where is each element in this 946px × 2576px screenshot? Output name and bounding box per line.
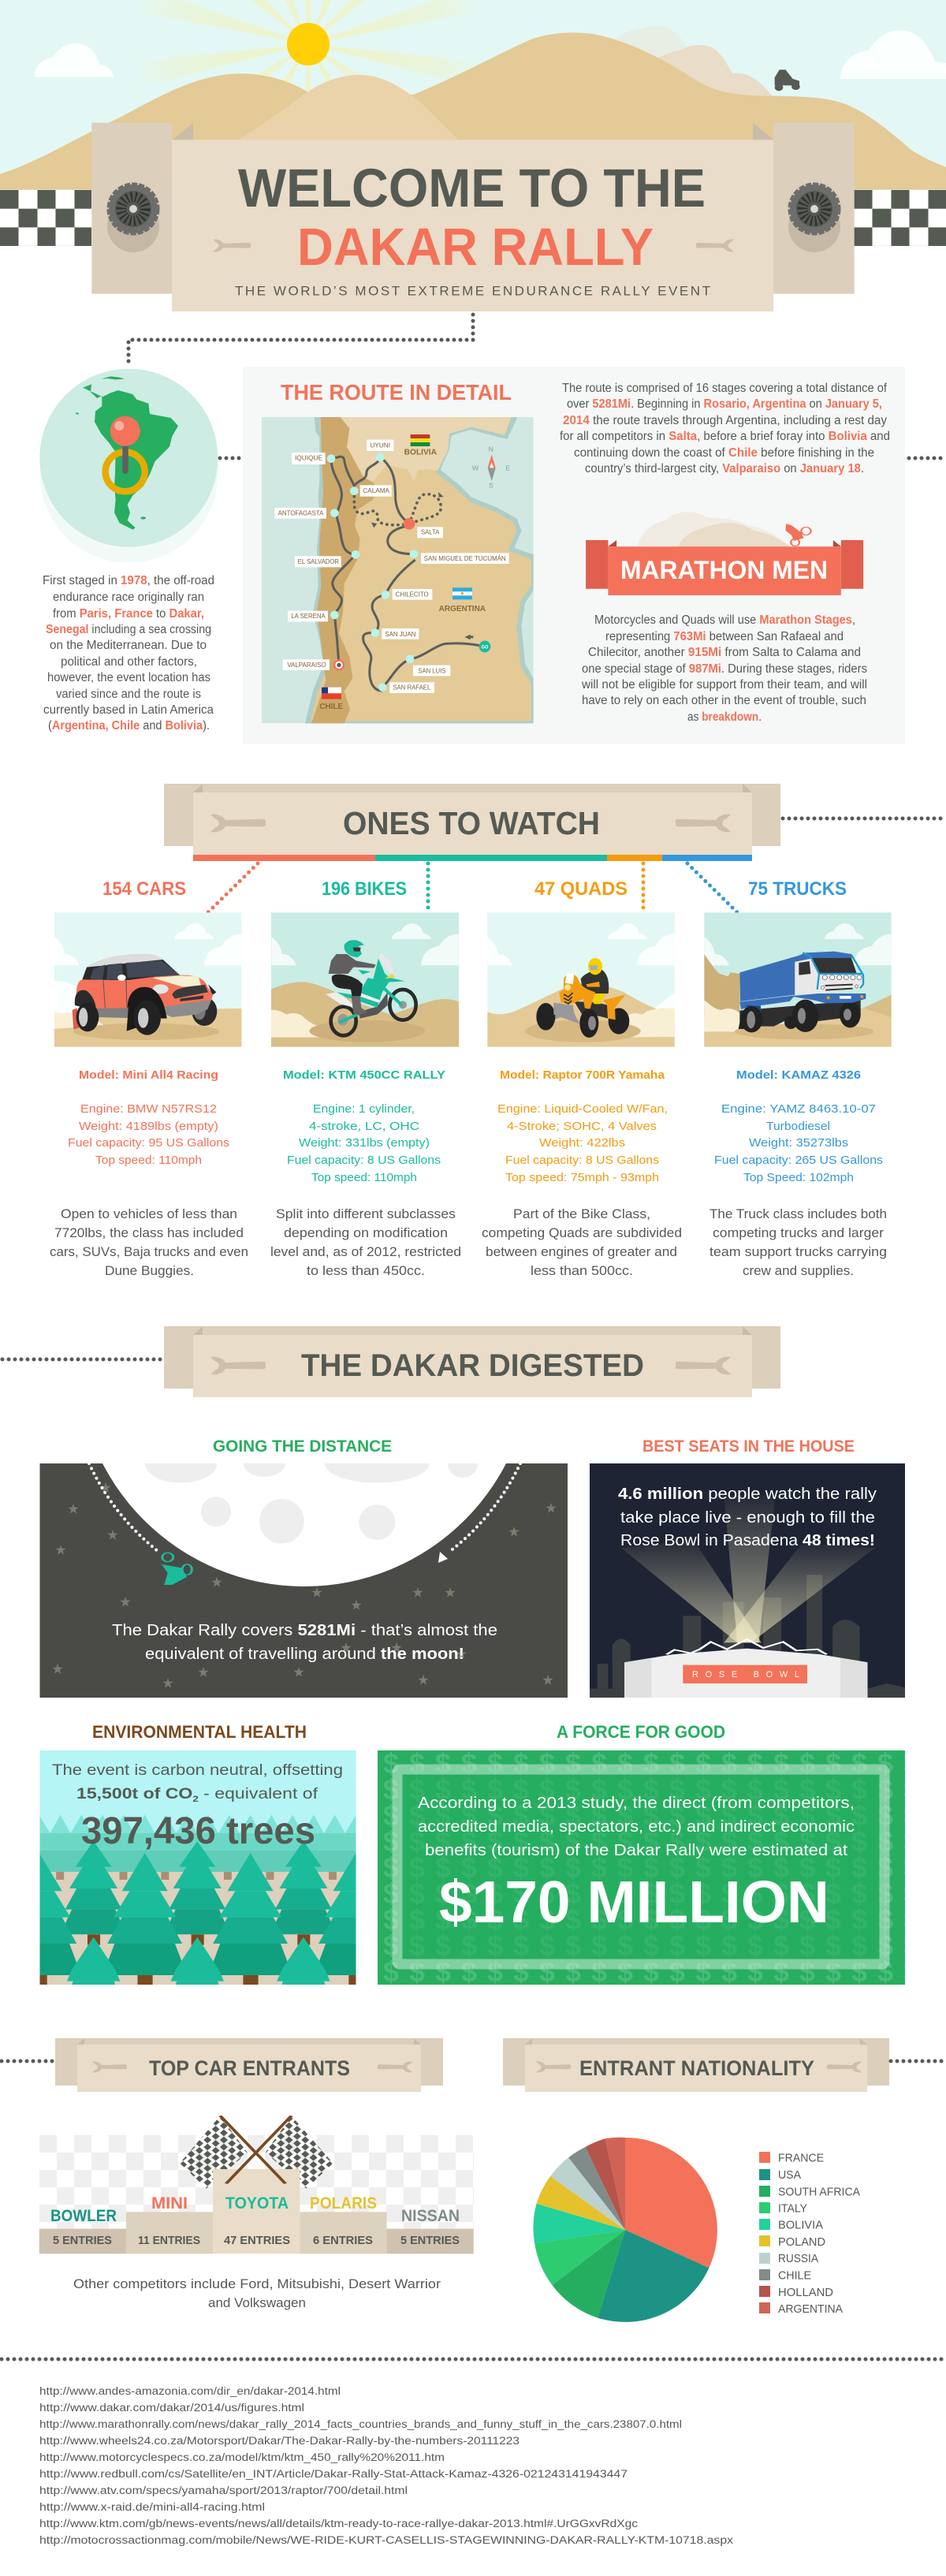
- wheel right: [788, 185, 840, 252]
- specs: 4-stroke, LC, OHC: [309, 1120, 419, 1133]
- heading: environmental health: ENVIRONMENTAL HEALTH: [92, 1722, 307, 1742]
- specs: Fuel capacity: 8 US Gallons: [287, 1154, 441, 1167]
- specs: Engine: BMW N57RS12: [80, 1103, 217, 1116]
- model line: Model: Mini All4 Racing: [79, 1069, 218, 1082]
- route lines: [331, 457, 485, 691]
- model line: Model: KTM 450CC RALLY: [283, 1069, 445, 1082]
- specs: [714, 1103, 883, 1184]
- model line: Model: KAMAZ 4326: [736, 1069, 861, 1082]
- force text: According to a 2013 study, the direct (from competitors,: [418, 1795, 855, 1812]
- specs: Top speed: 75mph - 93mph: [505, 1172, 659, 1184]
- title: [238, 158, 706, 277]
- carbon text: 15,500t of CO: [76, 1786, 192, 1802]
- description: cars, SUVs, Baja trucks and even: [50, 1244, 248, 1259]
- clouds behind banner: [639, 512, 791, 546]
- flags and country names: [319, 434, 486, 711]
- icon: wrench right: [674, 1357, 731, 1374]
- marathon paragraph: Chilecitor, another 915Mi from Salta to Calama and: [588, 646, 861, 659]
- marathon paragraph: representing 763Mi between San Rafaeal and: [605, 630, 844, 643]
- description: [270, 1206, 461, 1278]
- panel: rose bowl: [590, 1463, 905, 1698]
- connector: quads: [642, 863, 645, 912]
- chart legend: BOLIVIA: [778, 2219, 823, 2231]
- specs: Fuel capacity: 265 US Gallons: [714, 1154, 883, 1167]
- column: trucks: [704, 878, 892, 1278]
- brand names: POLARIS: [310, 2194, 377, 2213]
- specs: Fuel capacity: 8 US Gallons: [505, 1154, 659, 1167]
- carbon text: - equivalent of: [199, 1786, 318, 1802]
- history paragraph: from Paris, France to Dakar,: [53, 607, 204, 621]
- dotted connector right of entrant nationality: [891, 2060, 946, 2063]
- dotted divider above sources: [2, 2358, 946, 2361]
- heading: 196 bikes: 196 BIKES: [322, 878, 407, 900]
- description: crew and supplies.: [743, 1263, 854, 1278]
- specs: 4-Stroke; SOHC, 4 Valves: [507, 1120, 657, 1133]
- connector: bikes: [426, 863, 430, 912]
- route map: IQUIQUE: [295, 454, 322, 462]
- illustration: rally bike: [271, 912, 459, 1047]
- description: to less than 450cc.: [307, 1263, 425, 1278]
- route paragraph: The route is comprised of 16 stages covering a total distance of: [562, 382, 888, 395]
- marathon paragraph: one special stage of 987Mi. During these stages, riders: [582, 662, 867, 676]
- brand names: BOWLER: [50, 2207, 117, 2225]
- pin: [110, 416, 140, 474]
- icon: teal cyclist: [162, 1553, 192, 1585]
- title: DAKAR RALLY: [297, 218, 654, 277]
- dotted connector left of top car entrants: [2, 2060, 54, 2063]
- force text: benefits (tourism) of the Dakar Rally were estimated at: [425, 1842, 847, 1859]
- heading: 47 quads: 47 QUADS: [534, 878, 628, 900]
- subtitle: THE WORLD’S MOST EXTREME ENDURANCE RALLY EVENT: [235, 284, 710, 298]
- checkered stripe right: [854, 190, 946, 246]
- route map: SALTA: [421, 528, 440, 536]
- history paragraph: however, the event location has: [47, 671, 210, 684]
- arrow head: [438, 1552, 448, 1563]
- heading: a force for good: A FORCE FOR GOOD: [557, 1722, 725, 1742]
- rose bowl text: [618, 1486, 877, 1549]
- header illustration: desert skyline: [0, 0, 946, 190]
- illustration: quad bike: [487, 912, 675, 1047]
- model line: Model: Raptor 700R Yamaha: [500, 1069, 665, 1082]
- brand names: MINI: [151, 2194, 188, 2213]
- illustration: rally car: [54, 912, 241, 1047]
- trees stat: 397,436 trees: [81, 1810, 315, 1852]
- specs: [68, 1103, 229, 1167]
- flags and country names: ARGENTINA: [439, 605, 486, 613]
- description: Dune Buggies.: [105, 1263, 194, 1278]
- specs: Weight: 422lbs: [539, 1137, 625, 1150]
- clouds, dunes and quad silhouette: [0, 26, 946, 190]
- chart legend: [759, 2151, 860, 2316]
- rose bowl text: take place live - enough to fill the: [620, 1509, 875, 1527]
- description: Part of the Bike Class,: [513, 1206, 650, 1221]
- history paragraph: (Argentina, Chile and Bolivia).: [48, 719, 210, 733]
- other competitors text: Other competitors include Ford, Mitsubishi, Desert Warrior: [73, 2276, 441, 2291]
- route paragraph: country’s third-largest city, Valparaiso on January 18.: [585, 462, 864, 475]
- icon: wrench right: [674, 815, 731, 832]
- moon: [88, 1463, 522, 1586]
- entry counts: 6 ENTRIES: [313, 2234, 373, 2247]
- panel: route in detail: [243, 367, 905, 744]
- heading: marathon men: MARATHON MEN: [620, 556, 828, 584]
- heading: 154 cars: 154 CARS: [102, 878, 186, 900]
- sources list: http://www.motorcyclespecs.co.za/model/ktm/ktm_450_rally%20%2011.htm: [39, 2451, 445, 2463]
- compass: W: [472, 464, 479, 472]
- route map: ANTOFAGASTA: [278, 509, 324, 517]
- sources list: http://www.marathonrally.com/news/dakar_rally_2014_facts_countries_brands_and_funny_stuff_in_the_cars.23807.0.html: [39, 2418, 682, 2430]
- icon: wrench left: [210, 1357, 267, 1374]
- entry counts: [53, 2234, 460, 2247]
- sources list: http://www.x-raid.de/mini-all4-racing.html: [39, 2501, 265, 2513]
- route map: CALAMA: [363, 486, 389, 494]
- description: 7720lbs, the class has included: [54, 1225, 244, 1240]
- dotted connector route panel to edge: [909, 456, 946, 460]
- sources list: http://www.ktm.com/gb/news-events/news/all/details/ktm-ready-to-race-rallye-dakar-2013.html#.UrGGxvRdXgc: [39, 2518, 638, 2529]
- description: Split into different subclasses: [276, 1206, 456, 1221]
- route map: GO: [482, 644, 488, 650]
- marathon paragraph: have to rely on each other in the event of trouble, such: [582, 694, 866, 707]
- sources list: http://www.dakar.com/dakar/2014/us/figures.html: [39, 2402, 304, 2414]
- marathon paragraph: [581, 613, 867, 724]
- podium steps: [39, 2169, 474, 2254]
- history paragraph: First staged in 1978, the off-road: [43, 574, 214, 587]
- flags and country names: CHILE: [319, 703, 343, 711]
- dotted connector right of ones to watch: [783, 817, 946, 820]
- wheel left: [107, 185, 159, 252]
- history paragraph: varied since and the route is: [56, 688, 201, 701]
- crossed checkered flags: [180, 2116, 333, 2189]
- specs: Engine: Liquid-Cooled W/Fan,: [497, 1103, 668, 1116]
- column: quads: [482, 878, 682, 1278]
- moon text: equivalent of travelling around the moon!: [145, 1646, 464, 1663]
- sources list: [39, 2385, 733, 2546]
- history paragraph: currently based in Latin America: [43, 703, 214, 717]
- sources list: http://www.atv.com/specs/yamaha/sport/2013/raptor/700/detail.html: [39, 2485, 408, 2496]
- description: competing Quads are subdivided: [482, 1225, 682, 1240]
- skyline: [590, 1575, 905, 1698]
- description: competing trucks and larger: [713, 1225, 884, 1240]
- section banner: entrant nationality: [503, 2038, 889, 2092]
- specs: Engine: YAMZ 8463.10-07: [721, 1103, 876, 1116]
- sources list: http://www.andes-amazonia.com/dir_en/dakar-2014.html: [39, 2385, 341, 2397]
- brand names: [50, 2194, 460, 2225]
- entry counts: 5 ENTRIES: [400, 2234, 460, 2247]
- big number: $170 MILLION: [439, 1869, 829, 1935]
- icon: wrench left: [536, 2061, 572, 2073]
- route paragraph: [560, 382, 890, 475]
- heading: going the distance: GOING THE DISTANCE: [213, 1437, 392, 1456]
- forest: [39, 1815, 356, 1985]
- specs: Turbodiesel: [766, 1120, 830, 1133]
- specs: Weight: 4189lbs (empty): [79, 1120, 218, 1133]
- heading: the route in detail: THE ROUTE IN DETAIL: [281, 380, 512, 404]
- section banner: top car entrants: [55, 2038, 443, 2092]
- force text: [418, 1795, 855, 1859]
- icon: wrench right: [826, 2061, 862, 2073]
- column: cars: [50, 878, 248, 1278]
- icon: red cyclist: [785, 524, 811, 546]
- panel: a force for good: [378, 1750, 905, 1985]
- rose bowl text: Rose Bowl in Pasadena 48 times!: [620, 1532, 875, 1549]
- route paragraph: 2014 the route travels through Argentina, including a rest day: [563, 414, 887, 427]
- history paragraph: endurance race originally ran: [53, 591, 204, 604]
- route map: VALPARAISO: [287, 661, 326, 669]
- entry counts: 11 ENTRIES: [138, 2234, 200, 2247]
- dotted connector left of dakar digested: [2, 1358, 163, 1361]
- icon: wrench left: [213, 239, 252, 252]
- illustration: rally truck: [704, 912, 892, 1047]
- brand names: TOYOTA: [225, 2194, 289, 2213]
- entry counts: 5 ENTRIES: [53, 2234, 112, 2247]
- column: bikes: [270, 878, 461, 1278]
- description: [482, 1206, 682, 1278]
- sources list: http://www.redbull.com/cs/Satellite/en_INT/Article/Dakar-Rally-Stat-Attack-Kamaz-4326-021243141943447: [39, 2468, 628, 2480]
- chart legend: POLAND: [778, 2235, 825, 2249]
- route map: LA SERENA: [291, 612, 326, 620]
- compass: [472, 445, 510, 490]
- stop labels: [274, 440, 509, 693]
- history paragraph: Senegal including a sea crossing: [46, 623, 211, 636]
- description: [50, 1206, 248, 1278]
- other competitors text: and Volkswagen: [208, 2295, 306, 2310]
- chart: entrant nationality pie: [533, 2138, 717, 2322]
- heading: ONES TO WATCH: [343, 805, 600, 841]
- icon: wrench right: [377, 2061, 412, 2073]
- dotted connector globe to route panel: [220, 456, 241, 460]
- chart legend: RUSSIA: [778, 2252, 818, 2265]
- heading: best seats in the house: BEST SEATS IN THE HOUSE: [642, 1437, 855, 1456]
- chart legend: USA: [778, 2168, 801, 2182]
- panel: moon comparison: [39, 1463, 568, 1698]
- route paragraph: for all competitors in Salta, before a brief foray into Bolivia and: [560, 430, 890, 443]
- specs: Top speed: 110mph: [95, 1154, 202, 1167]
- route paragraph: continuing down the coast of Chile before finishing in the: [574, 446, 874, 460]
- chart legend: CHILE: [778, 2269, 811, 2282]
- route map: SAN MIGUEL DE TUCUMÁN: [424, 554, 506, 562]
- sun: [287, 23, 330, 65]
- globe with location pin: [39, 369, 218, 563]
- marathon paragraph: will not be eligible for support from their team, and will: [581, 678, 867, 692]
- main title banner: [91, 123, 855, 311]
- route map: UYUNI: [370, 441, 390, 449]
- description: The Truck class includes both: [710, 1206, 887, 1221]
- chart legend: SOUTH AFRICA: [778, 2186, 860, 2198]
- brand names: NISSAN: [401, 2207, 460, 2225]
- chart legend: HOLLAND: [778, 2286, 833, 2299]
- description: between engines of greater and: [486, 1244, 677, 1259]
- frame: [397, 1769, 885, 1964]
- route map: EL SALVADOR: [298, 557, 339, 565]
- pin ring: [106, 452, 145, 491]
- other competitors text: [73, 2276, 441, 2310]
- marathon paragraph: Motorcycles and Quads will use Marathon Stages,: [594, 613, 855, 627]
- icon: wrench right: [695, 239, 734, 252]
- route map: SAN RAFAEL: [393, 684, 430, 692]
- connector: cars: [208, 863, 258, 912]
- route map: [262, 417, 534, 723]
- stadium: [624, 1649, 868, 1698]
- moon text: [112, 1622, 497, 1663]
- icon: wrench left: [210, 815, 267, 832]
- description: depending on modification: [284, 1225, 448, 1240]
- description: team support trucks carrying: [710, 1244, 887, 1259]
- compass: N: [489, 445, 493, 453]
- chart: top car entrants podium: [39, 2116, 474, 2254]
- description: level and, as of 2012, restricted: [270, 1244, 461, 1259]
- South America map: [76, 376, 178, 530]
- carbon text: 2: [192, 1795, 199, 1804]
- route map: CHILECITO: [396, 590, 429, 598]
- route map: SAN JUAN: [385, 630, 415, 638]
- section banner: ones to watch: [164, 784, 780, 861]
- spotlights: [621, 1496, 875, 1642]
- sources list: http://motocrossactionmag.com/mobile/News/WE-RIDE-KURT-CASELLIS-STAGEWINNING-DAKAR-RALLY-KTM-10718.aspx: [39, 2534, 733, 2546]
- specs: Engine: 1 cylinder,: [313, 1103, 415, 1116]
- specs: Top speed: 110mph: [311, 1172, 417, 1184]
- specs: Fuel capacity: 95 US Gallons: [68, 1137, 229, 1150]
- carbon text: The event is carbon neutral, offsetting: [52, 1762, 343, 1779]
- rose bowl text: 4.6 million people watch the rally: [618, 1486, 877, 1503]
- chart legend: FRANCE: [778, 2151, 824, 2165]
- description: [710, 1206, 887, 1278]
- marathon men banner: [586, 512, 863, 595]
- carbon text: [52, 1762, 343, 1804]
- specs: Top Speed: 102mph: [743, 1172, 854, 1184]
- description: Open to vehicles of less than: [61, 1206, 237, 1221]
- force text: accredited media, spectators, etc.) and indirect economic: [418, 1818, 855, 1836]
- compass: S: [489, 482, 493, 490]
- moon text: The Dakar Rally covers 5281Mi - that’s almost the: [112, 1622, 497, 1639]
- colour bar: [193, 855, 752, 861]
- dotted connector from title to globe: [128, 315, 473, 366]
- sun rays: [149, 0, 468, 91]
- heading: ENTRANT NATIONALITY: [579, 2056, 814, 2080]
- route paragraph: over 5281Mi. Beginning in Rosario, Argentina on January 5,: [567, 397, 882, 411]
- specs: Weight: 35273lbs: [749, 1137, 848, 1150]
- heading: THE DAKAR DIGESTED: [301, 1348, 644, 1383]
- specs: [287, 1103, 441, 1184]
- section banner: the dakar digested: [164, 1326, 780, 1397]
- panel: environmental health: [39, 1750, 356, 1985]
- connector: trucks: [687, 863, 737, 912]
- icon: wrench left: [92, 2061, 128, 2073]
- entry counts: 47 ENTRIES: [224, 2234, 290, 2247]
- history paragraph: on the Mediterranean. Due to: [50, 639, 207, 652]
- heading: 75 trucks: 75 TRUCKS: [748, 878, 847, 900]
- flags and country names: BOLIVIA: [404, 449, 437, 457]
- route map: SAN LUIS: [418, 666, 446, 674]
- history paragraph: political and other factors,: [61, 655, 197, 669]
- history paragraph: [43, 574, 214, 733]
- title: WELCOME TO THE: [238, 158, 706, 218]
- description: less than 500cc.: [531, 1263, 633, 1278]
- marathon paragraph: as breakdown.: [687, 710, 762, 724]
- checkered stripe left: [0, 190, 91, 246]
- chart legend: ARGENTINA: [778, 2302, 843, 2316]
- heading: TOP CAR ENTRANTS: [149, 2056, 350, 2080]
- stars: [52, 1482, 557, 1688]
- specs: Weight: 331lbs (empty): [299, 1137, 430, 1150]
- sources list: http://www.wheels24.co.za/Motorsport/Dakar/The-Dakar-Rally-by-the-numbers-20111223: [39, 2435, 520, 2447]
- route stops: [327, 453, 418, 692]
- compass: E: [505, 464, 510, 472]
- specs: [497, 1103, 668, 1184]
- sign text: ROSE BOWL: [692, 1670, 799, 1679]
- chart legend: ITALY: [778, 2201, 807, 2216]
